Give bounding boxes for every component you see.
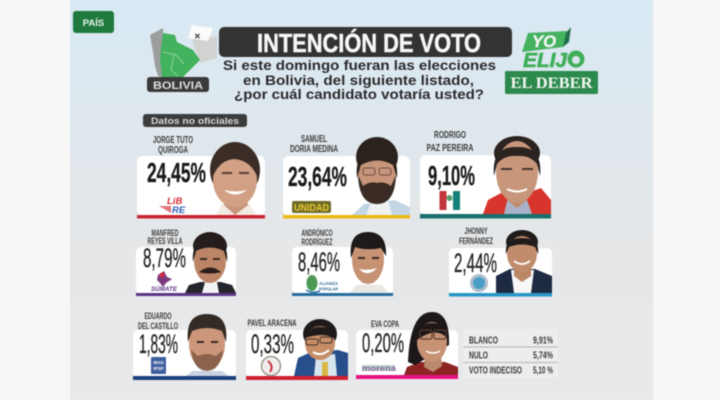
- section tag: País: [73, 11, 114, 33]
- survey question: [223, 57, 496, 102]
- panel: Andrónico Rodríguez: [292, 227, 393, 296]
- table: blanco, nulo, voto indeciso: VOTO INDECISO: [469, 366, 522, 376]
- table: blanco, nulo, voto indeciso: 9,91%: [533, 336, 553, 346]
- logo: Yo Elijo: ELIJ: [523, 50, 568, 72]
- portrait: Aracena: [294, 319, 348, 376]
- portrait: Reyes Villa: [185, 232, 236, 293]
- panel: Rodrigo Paz Pereira: RODRIGO: [434, 130, 466, 141]
- logo: MAS-IPSP: [151, 357, 166, 374]
- logo: UCS: [470, 274, 488, 292]
- panel: Rodrigo Paz Pereira: [420, 130, 551, 218]
- logo: Alianza Popular: [306, 275, 339, 292]
- title bar: INTENCIÓN DE VOTO: [257, 28, 481, 58]
- survey question: ¿por cuál candidato votaría usted?: [234, 86, 484, 102]
- panel: Jorge Tuto Quiroga: JORGE TUTO: [153, 135, 193, 146]
- portrait: Quiroga: [210, 142, 260, 215]
- panel: Andrónico Rodríguez: RODRÍGUEZ: [302, 237, 333, 248]
- logo: Alianza Popular: ALIANZA: [319, 281, 339, 286]
- panel: Jhonny Fernández: FERNÁNDEZ: [459, 236, 493, 247]
- logo: El Deber: EL DEBER: [510, 75, 593, 92]
- table: blanco, nulo, voto indeciso: NULO: [469, 350, 488, 362]
- table: blanco, nulo, voto indeciso: [463, 329, 558, 378]
- logo: Morena: morena: [362, 364, 397, 373]
- panel: Rodrigo Paz Pereira: 9,10%: [428, 160, 475, 191]
- portrait: Copa: [404, 312, 458, 375]
- note: Datos no oficiales: Datos no oficiales: [151, 116, 239, 126]
- panel: Eduardo del Castillo: 1,83%: [139, 329, 178, 359]
- logo: Libre: RE: [172, 205, 186, 216]
- survey question: Si este domingo fueran las elecciones: [223, 57, 496, 73]
- panel: Eva Copa: 0,20%: [362, 328, 404, 358]
- panel: Samuel Doria Medina: [283, 134, 410, 218]
- logo: MAS-IPSP: MAS: [154, 360, 164, 365]
- panel: Jorge Tuto Quiroga: [137, 135, 265, 218]
- panel: Samuel Doria Medina: SAMUEL: [301, 134, 327, 145]
- survey question: en Bolivia, del siguiente listado,: [243, 72, 474, 88]
- panel: Rodrigo Paz Pereira: PAZ PEREIRA: [426, 143, 474, 154]
- portrait: Doria Medina: [352, 137, 410, 215]
- logo: El Deber: [505, 71, 598, 94]
- panel: Jorge Tuto Quiroga: QUIROGA: [158, 145, 188, 156]
- logo: Yo Elijo: [522, 27, 584, 72]
- logo: PDC: [439, 191, 460, 210]
- panel: Manfred Reyes Villa: REYES VILLA: [148, 236, 183, 247]
- portrait: Rodríguez: [350, 232, 389, 293]
- panel: Eduardo del Castillo: EDUARDO: [144, 311, 172, 322]
- panel: Eva Copa: [356, 312, 458, 379]
- table: blanco, nulo, voto indeciso: 5,10 %: [533, 366, 553, 376]
- section tag: País: PAÍS: [83, 18, 104, 29]
- panel: Manfred Reyes Villa: [136, 228, 236, 296]
- icon: Bolivia map with ballot box: BOLIVIA: [153, 80, 203, 92]
- portrait: Paz Pereira: [483, 136, 551, 214]
- panel: Jhonny Fernández: 2,44%: [454, 248, 497, 278]
- logo: Libre: [159, 196, 186, 216]
- panel: Samuel Doria Medina: DORIA MEDINA: [290, 144, 338, 155]
- logo: ADN: [262, 356, 280, 376]
- panel: Manfred Reyes Villa: 8,79%: [143, 243, 186, 273]
- panel: Andrónico Rodríguez: 8,46%: [298, 247, 340, 277]
- panel: Pavel Aracena: [246, 318, 348, 380]
- logo: Yo Elijo: YO: [532, 32, 556, 51]
- icon: Bolivia map with ballot box: ✕: [194, 32, 201, 41]
- portrait: Fernández: [496, 230, 552, 293]
- panel: Jhonny Fernández: [449, 226, 552, 296]
- logo: Libre: LiB: [167, 196, 182, 207]
- panel: Jhonny Fernández: JHONNY: [464, 226, 488, 237]
- panel: Pavel Aracena: PAVEL ARACENA: [248, 318, 297, 329]
- table: blanco, nulo, voto indeciso: 5,74%: [533, 350, 553, 362]
- portrait: Del Castillo: [186, 314, 229, 376]
- panel: Samuel Doria Medina: 23,64%: [288, 161, 347, 192]
- icon: Bolivia map with ballot box: [147, 25, 217, 92]
- panel: Eduardo del Castillo: [133, 311, 236, 380]
- note: Datos no oficiales: [143, 114, 247, 127]
- panel: Andrónico Rodríguez: ANDRÓNICO: [302, 227, 332, 239]
- logo: Alianza Popular: POPULAR: [319, 286, 339, 292]
- panel: Jorge Tuto Quiroga: 24,45%: [147, 157, 206, 188]
- panel: Manfred Reyes Villa: MANFRED: [152, 228, 179, 239]
- logo: MAS-IPSP: IPSP: [153, 366, 164, 371]
- table: blanco, nulo, voto indeciso: BLANCO: [469, 336, 498, 346]
- panel: Pavel Aracena: 0,33%: [251, 329, 294, 359]
- logo: Unidad: UNIDAD: [294, 202, 329, 214]
- logo: Súmate: SÚMATE: [151, 286, 178, 293]
- panel: Eva Copa: EVA COPA: [371, 319, 399, 330]
- panel: Eduardo del Castillo: DEL CASTILLO: [138, 321, 178, 332]
